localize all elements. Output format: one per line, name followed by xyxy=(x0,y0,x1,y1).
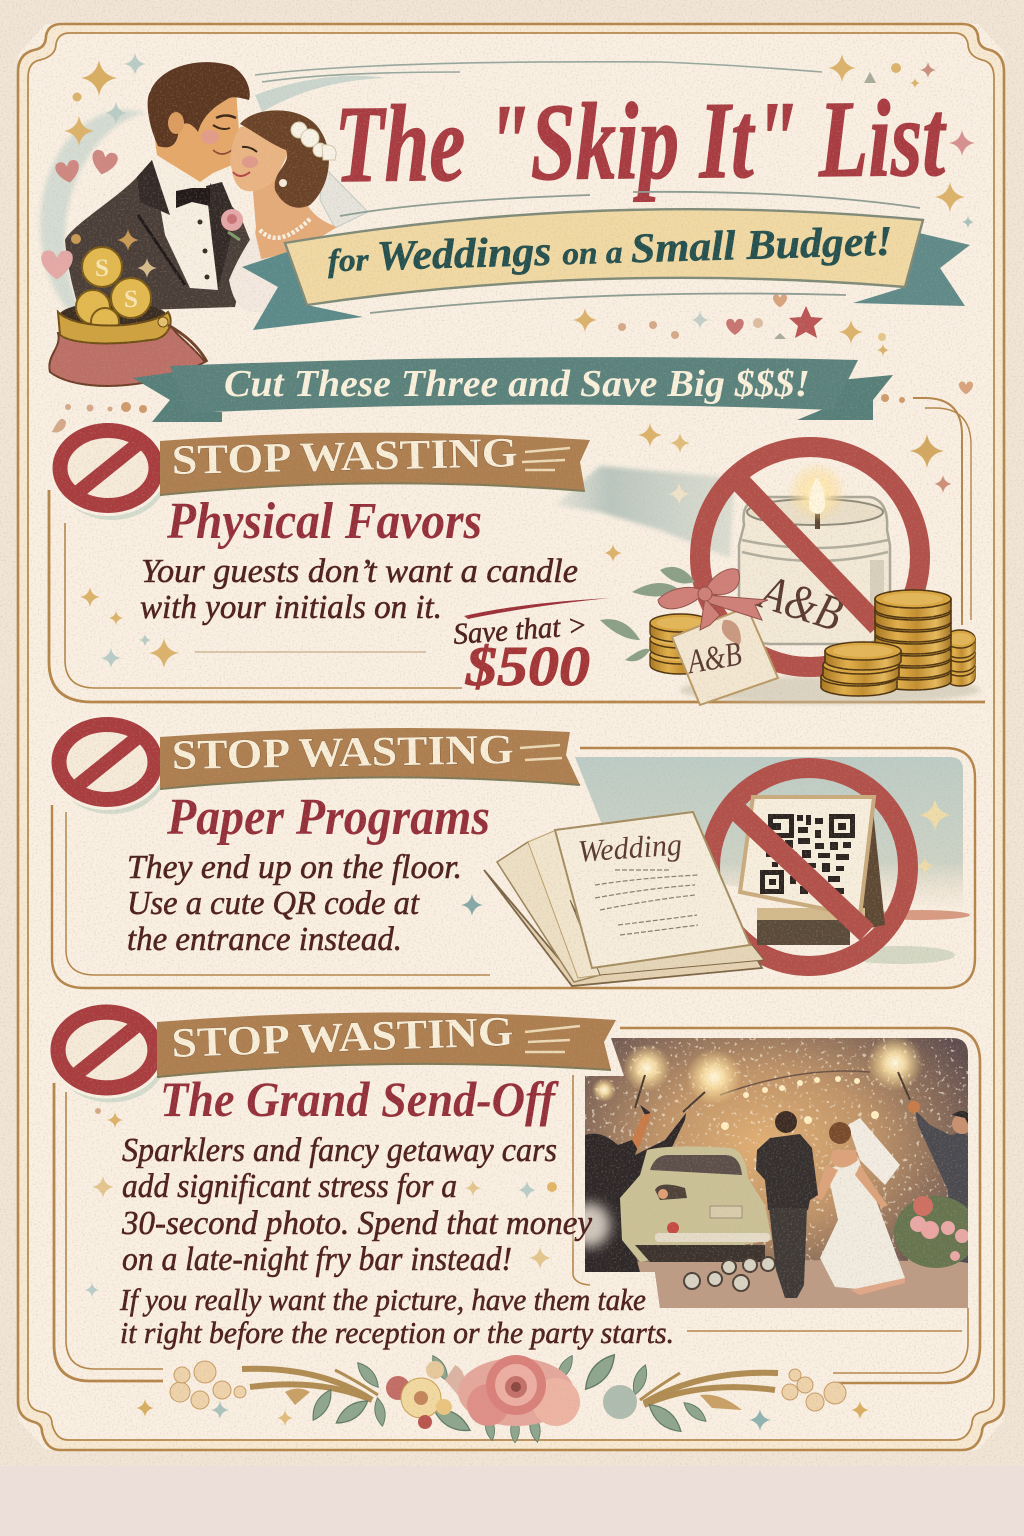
body text: with your initials on it. xyxy=(140,589,442,626)
stop wasting ribbon xyxy=(160,430,590,496)
body text: 30-second photo. Spend that money xyxy=(121,1205,593,1242)
stop wasting ribbon xyxy=(157,1009,616,1078)
flower clusters xyxy=(170,1361,846,1411)
body text xyxy=(140,553,578,626)
sparkles xyxy=(85,1108,557,1297)
header illustration: couple and purse xyxy=(40,53,975,433)
body text: on a late-night fry bar instead! xyxy=(122,1241,512,1278)
coin stack left xyxy=(650,614,711,674)
gold coins above purse xyxy=(76,247,151,336)
body text xyxy=(127,849,462,958)
panel outline xyxy=(54,1028,980,1383)
stack of programs xyxy=(484,812,764,986)
send-off photo illustration xyxy=(585,1035,980,1308)
wedding script: Wedding xyxy=(577,827,683,869)
boutonniere xyxy=(221,209,243,240)
flame xyxy=(787,462,847,522)
candle jar xyxy=(739,497,890,644)
prohibition ring xyxy=(700,447,920,667)
hearts and sparkles xyxy=(41,53,975,433)
leaves xyxy=(308,1350,709,1443)
slash xyxy=(738,480,878,626)
body text: Your guests don’t want a candle xyxy=(141,553,578,590)
rose bush xyxy=(894,1196,968,1268)
coin stacks right xyxy=(821,590,975,696)
panel: paper programs xyxy=(48,714,975,988)
header illustration: couple and purse: S xyxy=(95,255,109,282)
subtitle text: for Weddings on a Small Budget! xyxy=(327,219,893,281)
purse xyxy=(49,312,207,386)
body text: Use a cute QR code at xyxy=(127,885,420,922)
panel: grand send-off xyxy=(47,1002,980,1383)
panel outline xyxy=(49,398,985,702)
stop wasting ribbon xyxy=(160,727,580,790)
left guests xyxy=(585,1105,686,1272)
body text: add significant stress for a xyxy=(122,1168,457,1205)
bride in white gown xyxy=(815,1118,905,1295)
subtitle ribbon xyxy=(242,192,970,330)
heading: Paper Programs xyxy=(166,789,490,846)
tip text: If you really want the picture, have them take xyxy=(119,1282,646,1317)
pearl necklace xyxy=(260,219,310,238)
no-symbol badge xyxy=(48,714,167,814)
tin cans xyxy=(684,1257,775,1291)
body text: Sparklers and fancy getaway cars xyxy=(122,1132,557,1169)
heading: The Grand Send-Off xyxy=(160,1071,559,1127)
groom in dark suit xyxy=(756,1111,818,1298)
central rose xyxy=(458,1355,580,1426)
right guest xyxy=(908,1101,968,1263)
teal swoosh behind couple xyxy=(40,62,822,370)
qr scene xyxy=(484,768,908,986)
body text: They end up on the floor. xyxy=(127,849,462,886)
heading: Physical Favors xyxy=(166,493,482,550)
stop wasting ribbon: STOP WASTING xyxy=(171,430,518,484)
bride xyxy=(229,110,337,312)
groom xyxy=(65,62,250,312)
money glow xyxy=(570,1203,610,1247)
stop wasting ribbon: STOP WASTING xyxy=(171,1009,514,1067)
leaves xyxy=(600,567,695,661)
side flowers xyxy=(386,1361,637,1429)
bridal flowers xyxy=(291,122,336,160)
tip text xyxy=(119,1282,674,1350)
veil xyxy=(320,165,368,228)
pink bow xyxy=(658,569,768,630)
save callout: $500 xyxy=(465,636,590,698)
header illustration: couple and purse: S xyxy=(124,286,138,313)
sparkles xyxy=(80,382,973,668)
scene wash xyxy=(575,757,963,908)
string lights xyxy=(720,1071,879,1130)
prohibition ring xyxy=(710,768,908,966)
qr sign xyxy=(740,797,885,945)
tip text: it right before the reception or the party starts. xyxy=(120,1315,674,1350)
vintage car xyxy=(620,1146,772,1262)
save callout xyxy=(452,598,610,698)
purse interior xyxy=(59,302,167,330)
no-symbol badge xyxy=(49,420,168,520)
gift tag: A&B xyxy=(683,635,745,682)
save callout: Save that > xyxy=(452,609,588,651)
panel outline xyxy=(52,748,975,988)
gift tag xyxy=(672,607,778,705)
stop wasting ribbon: STOP WASTING xyxy=(171,727,514,779)
candle scene xyxy=(600,447,980,705)
callout text: Cut These Three and Save Big $$$! xyxy=(224,363,810,405)
gold vines xyxy=(242,1369,778,1405)
scene wash xyxy=(555,466,735,558)
sparklers xyxy=(592,1035,923,1112)
panel: physical favors xyxy=(49,382,985,705)
footer floral garland xyxy=(136,1350,869,1443)
body text: the entrance instead. xyxy=(127,921,402,958)
slash xyxy=(733,807,867,933)
no-symbol badge xyxy=(47,1002,167,1103)
teal callout ribbon xyxy=(133,357,893,422)
monogram: A&B xyxy=(752,563,849,642)
body text xyxy=(121,1132,593,1278)
